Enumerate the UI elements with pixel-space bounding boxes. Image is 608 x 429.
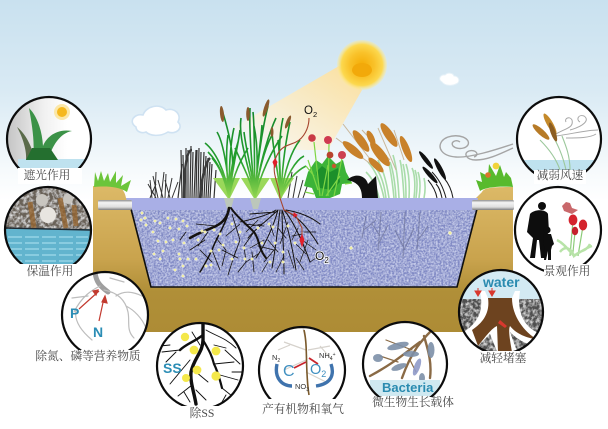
flowering bush — [304, 134, 352, 198]
label: N2: 2 — [277, 358, 280, 364]
panel: shading circle — [7, 97, 91, 184]
icon: shade plant — [29, 108, 72, 150]
icon: left grass on bank — [94, 171, 131, 192]
label: NO3: 3 — [306, 387, 309, 393]
label: O2 in circle: O — [310, 362, 321, 378]
red oxygen markers — [273, 159, 304, 246]
panel: microbe carrier circle — [362, 320, 448, 397]
icon: wind lines — [556, 116, 598, 138]
right cattails with pale reeds — [336, 121, 453, 198]
label: NH4: + — [333, 352, 336, 358]
plant group: green reeds with cattails — [205, 99, 306, 209]
label: nitrogen phosphorus removal: 除氮、磷等营养物质 — [35, 349, 141, 363]
cattail heads — [219, 99, 292, 137]
icon: tulips — [570, 220, 583, 256]
label: organics and oxygen: 产有机物和氧气 — [262, 402, 344, 416]
icon: right cloud — [440, 73, 459, 85]
label: P: P — [70, 305, 79, 321]
roots in clogged media — [465, 291, 536, 351]
label: shading: 遮光作用 — [24, 168, 70, 182]
root system left plant — [180, 208, 274, 275]
icon: sun small — [54, 104, 70, 120]
label: NH4: NH — [319, 351, 330, 360]
light green plant bases — [213, 178, 294, 200]
label: O2 top: 2 — [313, 110, 317, 119]
panel: wind reduction circle — [517, 97, 601, 184]
left inlet pipe — [98, 200, 132, 210]
label: clog reduction: 减轻堵塞 — [480, 351, 527, 365]
treatment particles — [140, 212, 452, 277]
label: C: C — [283, 363, 295, 380]
label: NO3: NO — [295, 382, 306, 391]
label: N2: N — [272, 353, 277, 362]
label: NH4: 4 — [330, 356, 333, 362]
icon: cattails — [532, 124, 550, 140]
label: O2 root: O — [315, 249, 324, 263]
oxygen path on root — [274, 118, 309, 246]
label: SS removal: 除SS — [190, 406, 214, 420]
panel: nitrogen phosphorus removal circle — [62, 272, 148, 360]
label: N: N — [93, 324, 103, 340]
label: wind reduction: 减弱风速 — [537, 168, 584, 182]
label: SS: SS — [163, 360, 182, 376]
icon: left cloud — [132, 106, 180, 135]
label: O2 root: 2 — [324, 256, 329, 265]
sky background — [0, 0, 608, 200]
black cattail silhouettes — [347, 150, 448, 198]
label: water: water — [482, 274, 520, 290]
panel: SS removal circle — [157, 323, 243, 418]
panel: insulation circle — [4, 186, 92, 264]
label: O2 in circle: 2 — [321, 369, 326, 379]
nutrient uptake arrows — [79, 290, 107, 321]
soil embankment — [93, 186, 513, 332]
right outlet pipe — [472, 200, 514, 210]
panel: wetland basin gravel bed — [126, 198, 478, 287]
label: O2 top: O — [304, 105, 313, 117]
faint reflected roots under right plants — [362, 212, 428, 258]
panel: organics and oxygen circle — [258, 326, 346, 399]
black silhouette plants left — [148, 146, 308, 198]
label: microbe carrier: 微生物生长载体 — [372, 395, 454, 409]
icon: right grass and flowers on bank — [476, 163, 513, 191]
panel: landscape circle — [515, 187, 601, 278]
icon: bird — [562, 202, 578, 214]
icon: cycle arrows — [276, 364, 332, 386]
label: insulation: 保温作用 — [27, 264, 73, 278]
wind swirl — [440, 136, 513, 160]
icon: sun — [337, 40, 387, 90]
sun light beam — [232, 66, 362, 150]
label: Bacteria: Bacteria — [382, 380, 434, 395]
root system right plant — [240, 210, 320, 274]
icon: water flow arrows — [475, 288, 495, 296]
icon: adult and child silhouette — [527, 202, 554, 260]
label: landscape: 景观作用 — [544, 265, 590, 278]
panel: clog reduction circle — [458, 268, 544, 351]
water surface band — [126, 198, 478, 210]
